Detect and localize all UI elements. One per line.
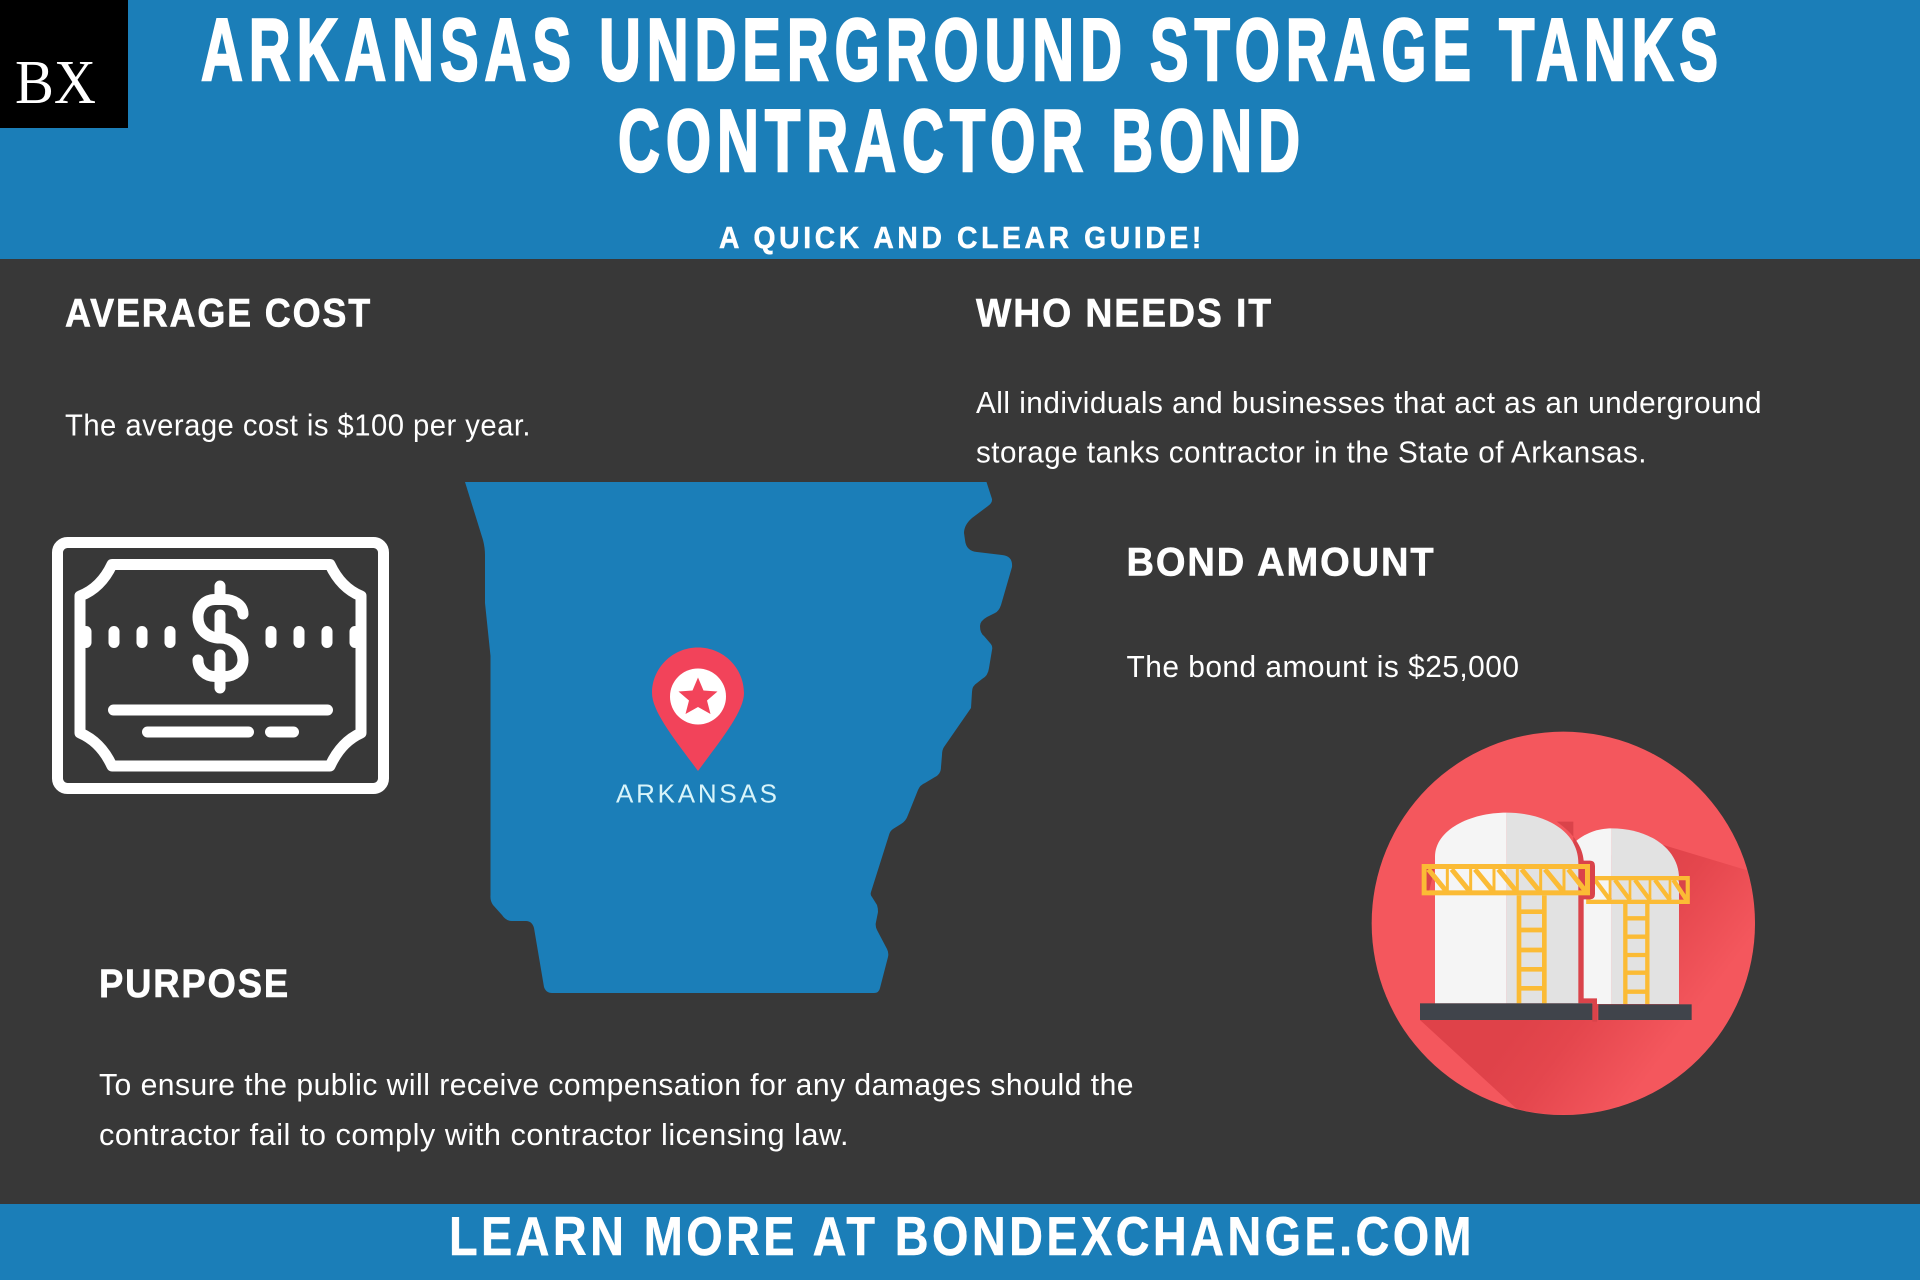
icon: bond certificate with dollar sign [58, 542, 384, 788]
panel: purpose [99, 962, 1134, 1152]
icon: map pin with star [652, 648, 744, 771]
panel: average cost [65, 292, 531, 442]
heading: average cost: AVERAGE COST [65, 292, 372, 336]
tank: front [1435, 813, 1578, 1003]
heading: bond amount: BOND AMOUNT [1126, 540, 1436, 584]
logo: BX: BX [15, 49, 96, 117]
header band [0, 0, 1920, 259]
subtitle: A QUICK AND CLEAR GUIDE! [719, 220, 1205, 255]
footer call to action: LEARN MORE AT BONDEXCHANGE.COM [449, 1205, 1475, 1267]
separation shadow between tanks [1557, 822, 1597, 1022]
tank: rear [1573, 828, 1679, 1004]
map label: Arkansas: ARKANSAS [616, 778, 777, 808]
crane: front [1424, 866, 1587, 1003]
panel: who needs it [976, 292, 1762, 470]
panel: bond amount [1126, 540, 1520, 684]
text: bond amount: The bond amount is $25,000 [1126, 649, 1520, 684]
title [201, 0, 1724, 190]
map: state of Arkansas [465, 482, 1012, 993]
logo: BX [0, 0, 128, 128]
text: purpose: contractor fail to comply with contractor licensing law. [99, 1117, 849, 1152]
heading: who needs it: WHO NEEDS IT [976, 292, 1273, 336]
icon: storage tanks in red circle [1372, 732, 1755, 1115]
heading: purpose: PURPOSE [99, 962, 290, 1006]
text: average cost: The average cost is $100 per year. [65, 408, 531, 442]
tank bases [1420, 1003, 1692, 1020]
text: purpose [99, 1067, 1134, 1152]
title: CONTRACTOR BOND [618, 91, 1306, 190]
text: who needs it: storage tanks contractor in the State of Arkansas. [976, 434, 1647, 470]
text: who needs it [976, 385, 1762, 470]
text: who needs it: All individuals and businesses that act as an underground [976, 385, 1762, 420]
crane: rear [1588, 878, 1688, 1004]
text: purpose: To ensure the public will receive compensation for any damages should the [99, 1067, 1134, 1102]
footer band [0, 1204, 1920, 1280]
